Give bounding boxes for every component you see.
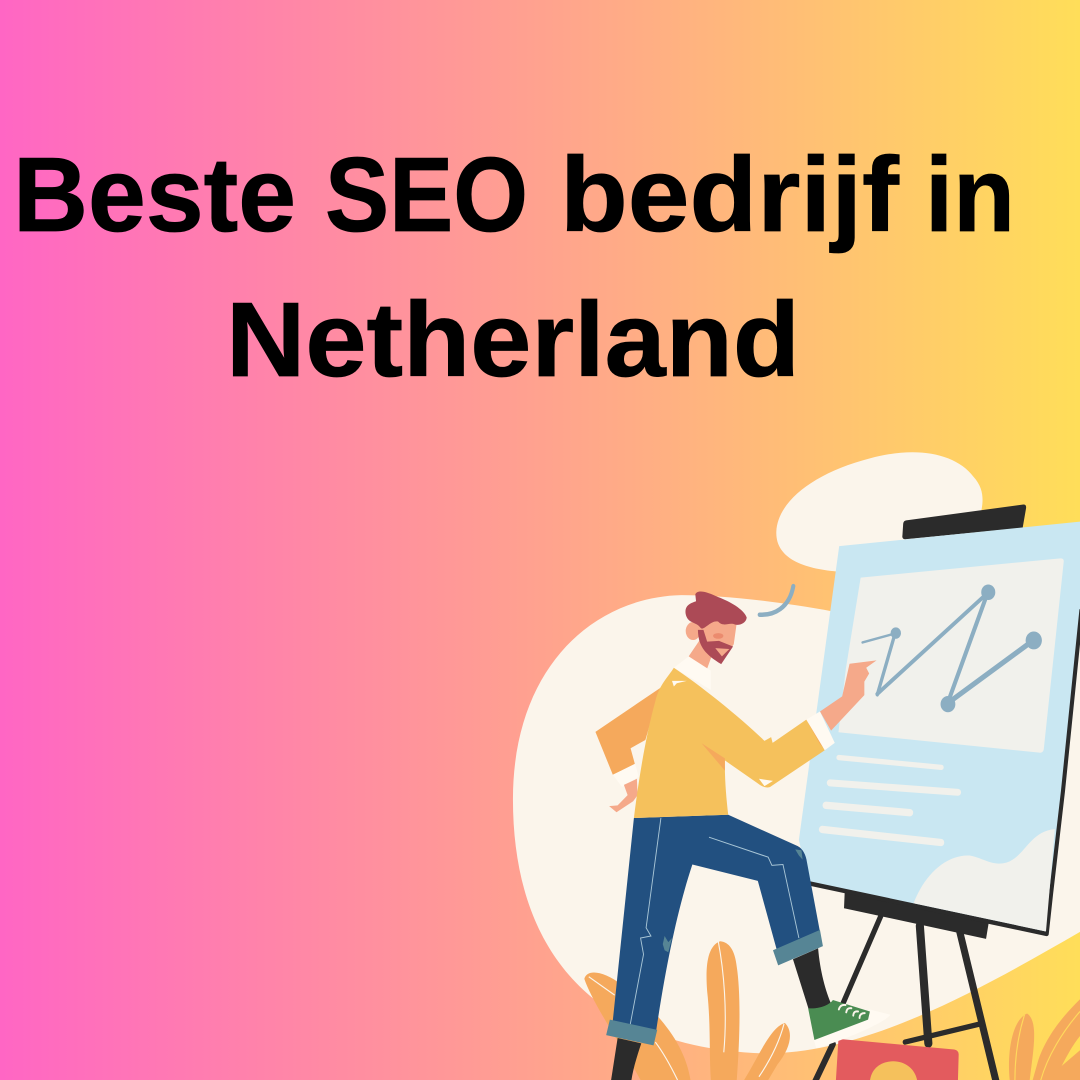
pointing arm <box>820 660 877 731</box>
back arm <box>595 687 662 775</box>
red bag <box>836 1039 959 1080</box>
beard <box>698 630 733 664</box>
jeans <box>613 815 820 1031</box>
front lower leg <box>611 1038 641 1080</box>
title: SEO <box>325 136 528 254</box>
title <box>13 136 1015 399</box>
plant: left group <box>584 941 790 1080</box>
jeans wear marks <box>663 849 803 952</box>
title: Beste <box>13 136 296 254</box>
back cuff <box>613 764 639 787</box>
sweater highlights <box>672 681 773 786</box>
chart paper <box>838 558 1064 753</box>
board frame <box>809 609 1080 934</box>
head <box>686 591 747 664</box>
sweater <box>634 668 825 818</box>
title: in <box>925 136 1015 254</box>
mouth <box>715 648 729 656</box>
line chart <box>863 585 1042 712</box>
flip chart board <box>799 522 1080 934</box>
background blob: large <box>513 562 1080 1054</box>
back hand <box>609 779 638 812</box>
person <box>595 591 890 1080</box>
crotch shadow <box>692 845 700 865</box>
title: bedrijf <box>560 136 900 254</box>
sweater shadows <box>702 720 826 771</box>
plant: right group <box>1009 999 1080 1080</box>
swoosh mark <box>760 586 793 615</box>
collar <box>674 656 711 690</box>
back lower leg <box>793 948 832 1010</box>
background blob: upper <box>776 452 983 571</box>
jeans seams <box>630 818 799 1025</box>
text lines <box>822 758 958 842</box>
shoe <box>808 1000 890 1048</box>
hair <box>686 591 747 629</box>
illustration <box>513 452 1080 1080</box>
easel ledge <box>844 891 989 939</box>
nose shade <box>713 633 723 639</box>
jeans cuffs <box>606 930 823 1045</box>
easel legs <box>814 916 996 1080</box>
easel top clip <box>902 504 1026 539</box>
sleeve cuff <box>806 711 835 750</box>
board corner hill <box>914 829 1055 931</box>
neck <box>689 640 722 671</box>
title: Netherland <box>226 281 800 399</box>
